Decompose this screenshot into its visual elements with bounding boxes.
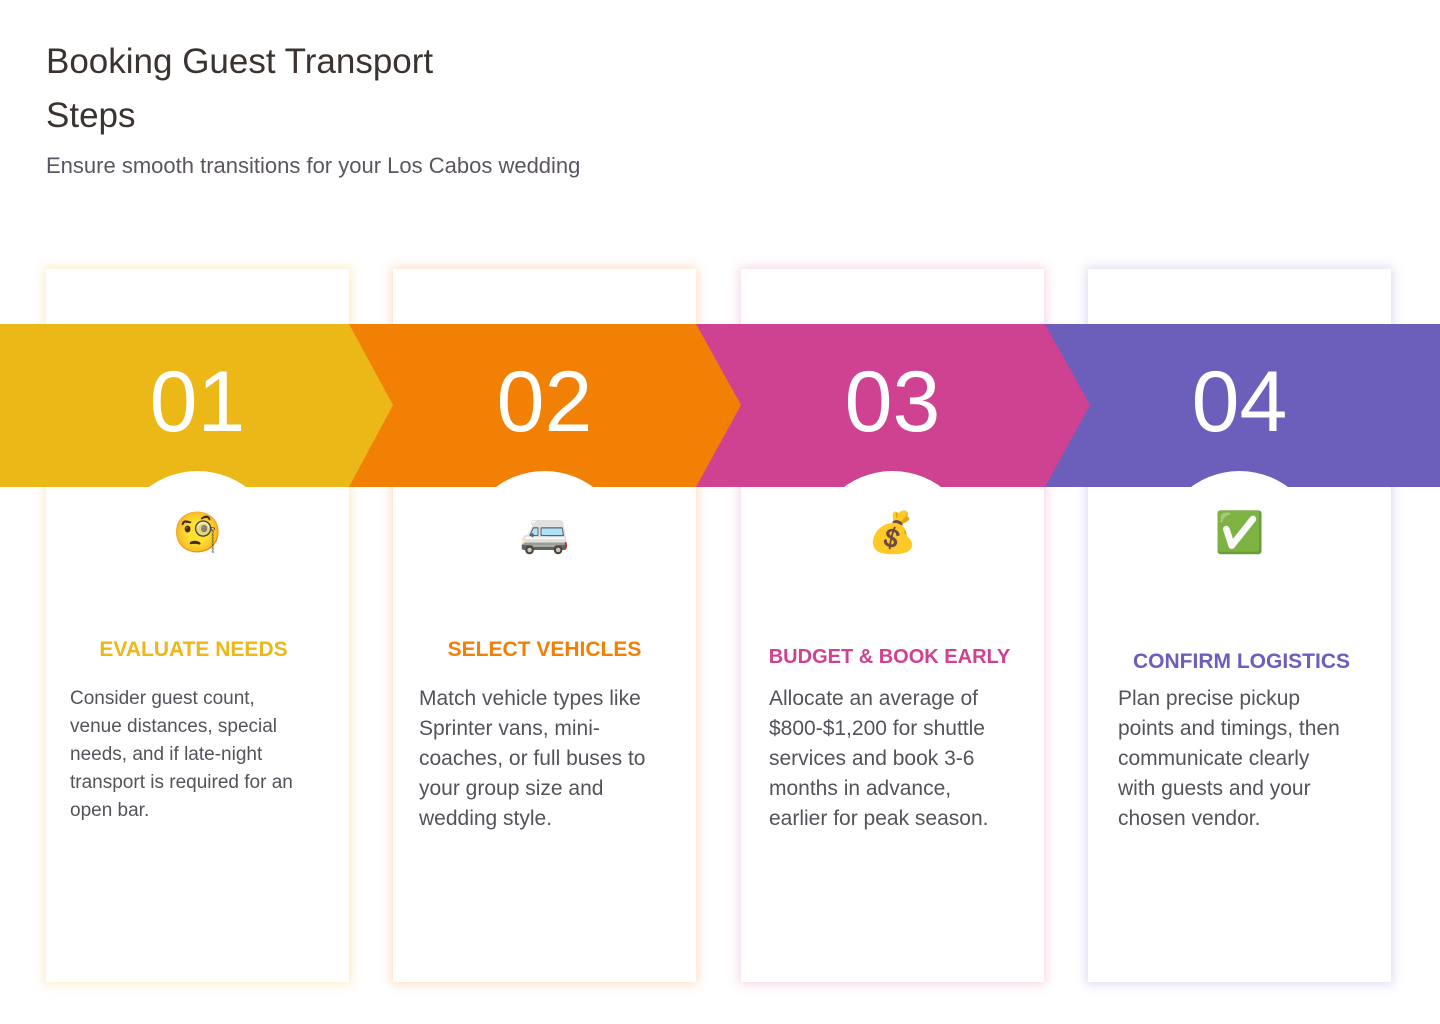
heading 3: BUDGET & BOOK EARLY [769,646,1010,668]
card 2 [393,269,696,982]
card 4 [1088,269,1391,982]
card 3 [741,269,1044,982]
icon: bus: 🚐 [520,509,569,556]
icon: monocle face: 🧐 [173,509,222,556]
text: 02 [497,354,592,450]
step numbers [150,354,1287,450]
text 2: Match vehicle types like Sprinter vans, mini-coaches, or full buses to your group size and wedding style. [419,687,645,830]
subtitle: Ensure smooth transitions for your Los Cabos wedding [46,153,580,178]
heading 1: EVALUATE NEEDS [99,638,288,661]
text 1: Consider guest count, venue distances, special needs, and if late-night transport is required for an open bar. [70,688,293,821]
text: 01 [150,354,245,450]
text 4: Plan precise pickup points and timings, then communicate clearly with guests and your chosen vendor. [1118,687,1340,830]
text: 03 [845,354,940,450]
text 3: Allocate an average of $800-$1,200 for shuttle services and book 3-6 months in advance, earlier for peak season. [769,687,988,830]
text: 04 [1192,354,1287,450]
card 1 [46,269,349,982]
icon: money bag: 💰 [868,509,917,556]
icon: check: ✅ [1215,509,1264,556]
heading 2: SELECT VEHICLES [448,638,641,661]
heading 4: CONFIRM LOGISTICS [1133,650,1350,673]
title: Booking Guest Transport Steps [46,42,433,135]
